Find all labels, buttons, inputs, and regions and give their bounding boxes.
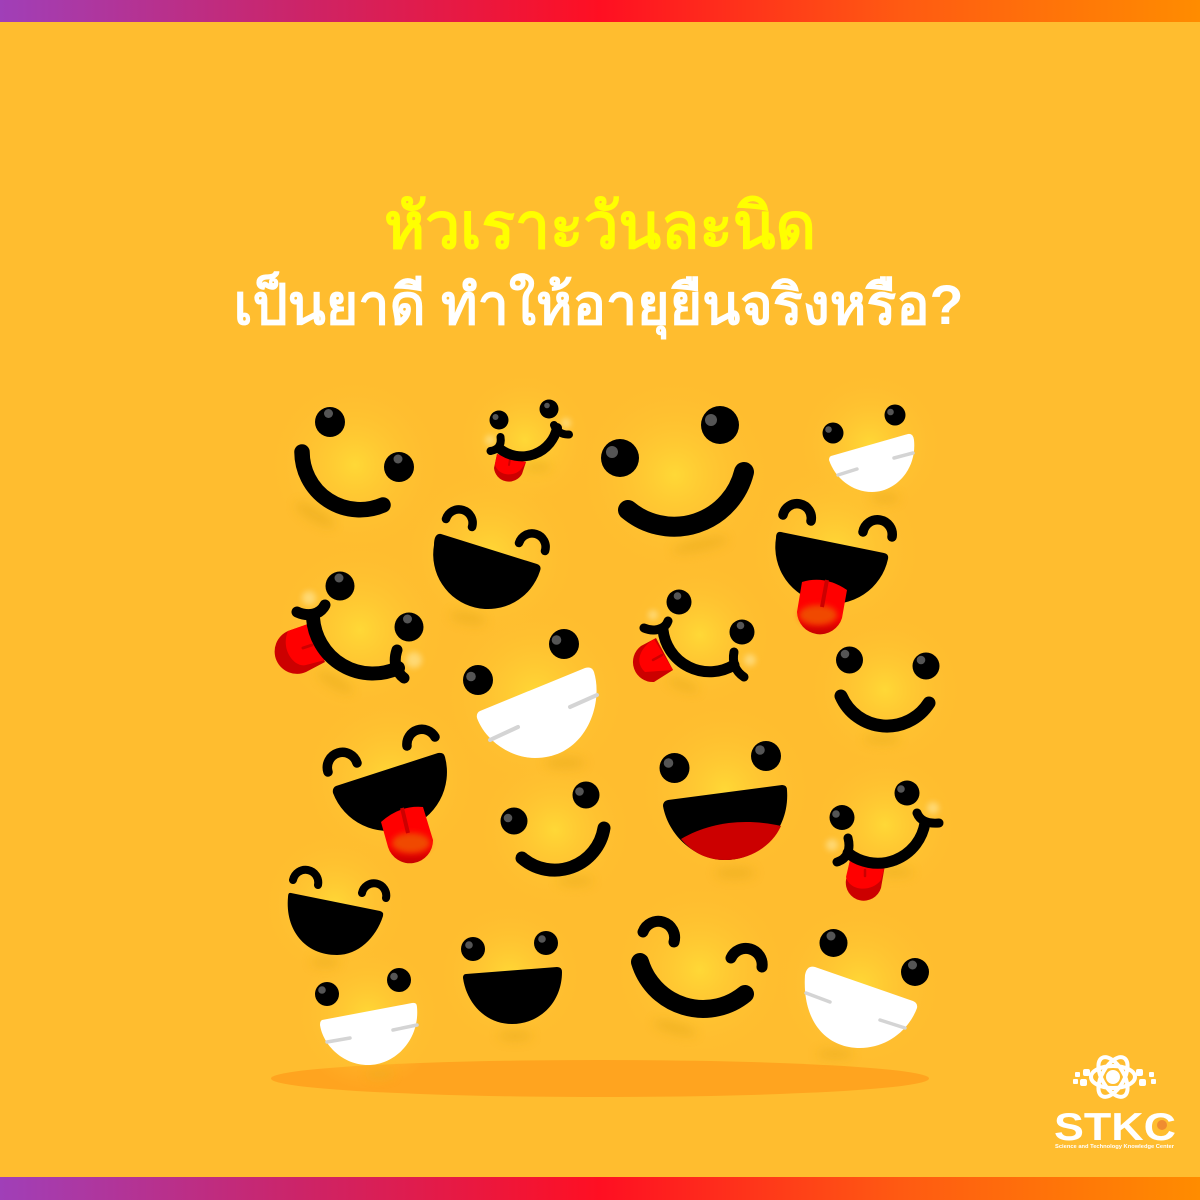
- top gradient bar: [0, 0, 1200, 22]
- face 6: tongue out left: [275, 572, 424, 678]
- face 5: black laugh: [433, 509, 546, 609]
- face 11: laugh with tongue left: [327, 729, 447, 863]
- face 15: black laugh lower left: [288, 870, 386, 955]
- ground shadow ellipse: [271, 1060, 929, 1097]
- face 13: open mouth with red tongue: [660, 741, 787, 860]
- face 12: smile center: [500, 782, 604, 870]
- face 19: white grin right: [805, 929, 929, 1048]
- logo wordmark: STKC: [1054, 1106, 1176, 1149]
- face 8: laugh with tongue: [775, 504, 892, 634]
- title: [234, 190, 964, 340]
- soft drop shadows under faces: [292, 462, 913, 1078]
- logo: STKC: [1054, 1052, 1176, 1150]
- face 1: smile: [302, 407, 414, 510]
- face glows: [260, 370, 965, 1090]
- face 10: smile right: [836, 646, 940, 726]
- face 4: white grin: [822, 404, 914, 492]
- face 3: large smile: [601, 406, 744, 527]
- face 7: big white grin: [463, 629, 597, 758]
- face 14: small tongue right: [826, 780, 939, 901]
- bottom gradient bar: [0, 1177, 1200, 1200]
- face 2: small tongue smile: [485, 400, 571, 482]
- face 9: small tongue left: [633, 590, 756, 682]
- title line 1: หัวเราะวันละนิด: [384, 190, 816, 262]
- face 17: flat black mouth: [461, 931, 562, 1024]
- logo icon: atom: [1073, 1052, 1156, 1102]
- title line 2: เป็นยาดี ทำให้อายุยืนจริงหรือ?: [234, 270, 964, 340]
- face 16: white grin bottom left: [315, 968, 417, 1065]
- logo tagline: Science and Technology Knowledge Center: [1055, 1144, 1175, 1150]
- face 18: closed-eye smile: [640, 921, 762, 1009]
